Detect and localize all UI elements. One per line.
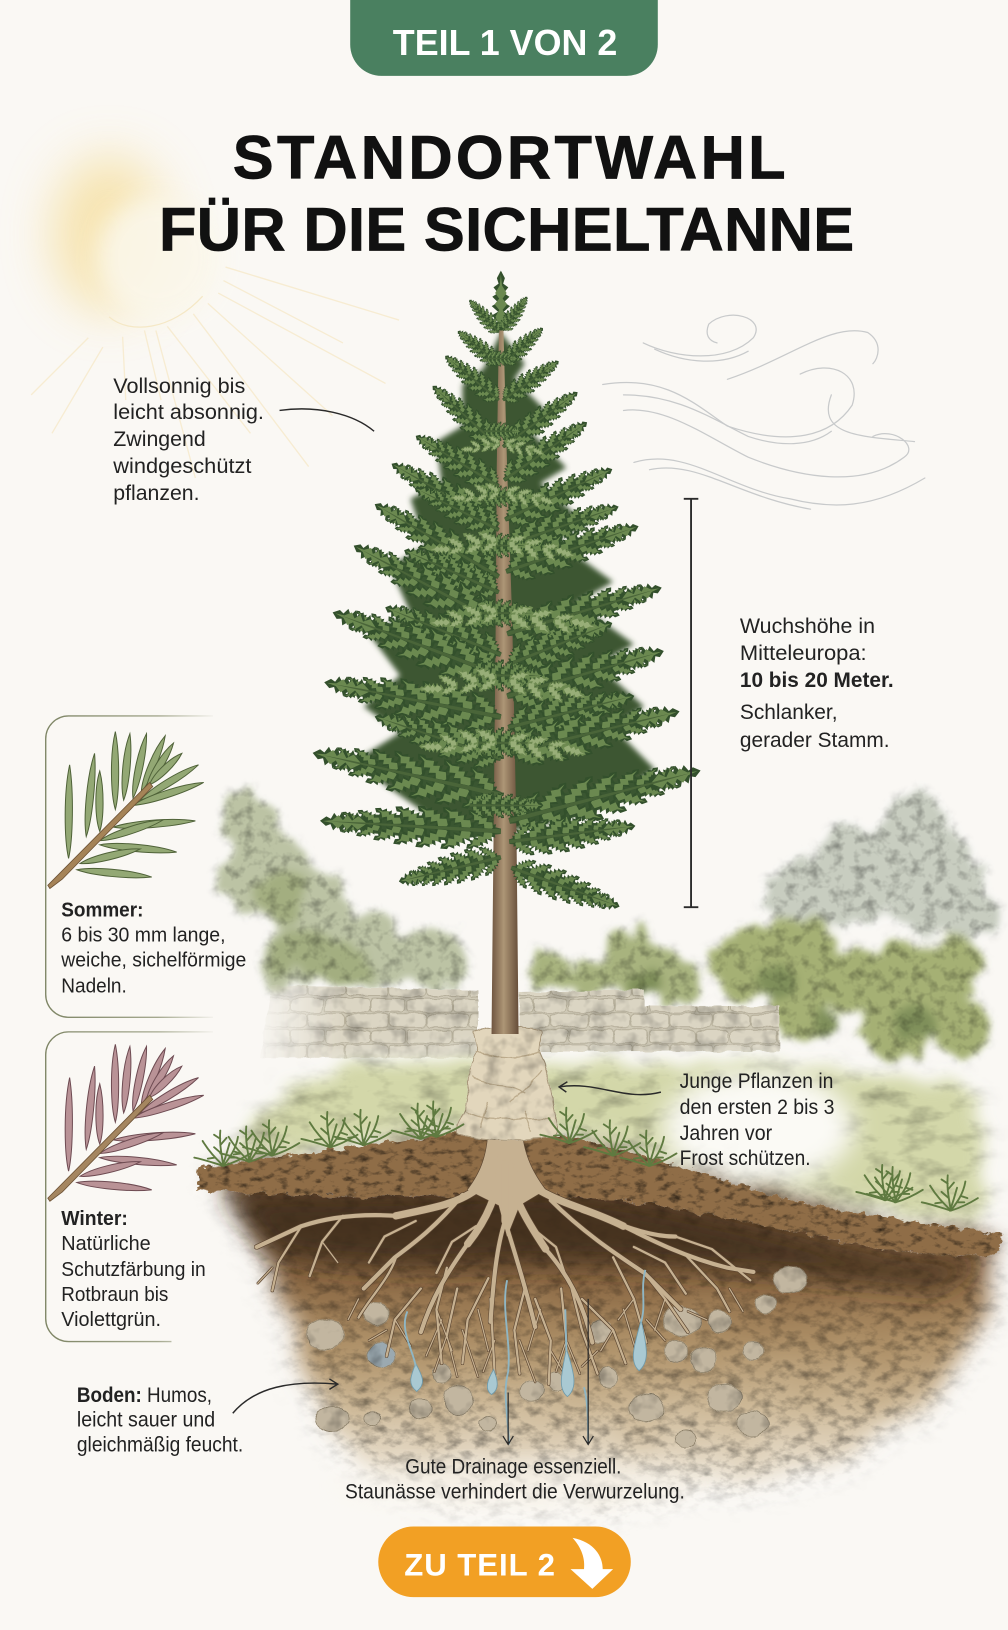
- text: frost protection note: Frost schützen.: [680, 1146, 811, 1170]
- icon: red-brown sprig: [48, 1044, 205, 1201]
- illustration: root system: [257, 1133, 753, 1384]
- text: frost protection note: Junge Pflanzen in: [680, 1069, 833, 1093]
- illustration: stone wall: [260, 985, 779, 1058]
- text: summer note: Nadeln.: [61, 975, 127, 997]
- text: soil note: leicht sauer und: [77, 1408, 215, 1432]
- text: drainage note: Gute Drainage essenziell.: [405, 1455, 621, 1479]
- text: drainage note: Staunässe verhindert die Verwurzelung.: [345, 1479, 685, 1503]
- text: growth height note: Wuchshöhe in: [740, 614, 875, 638]
- tree trunk: [492, 272, 519, 1034]
- illustration: grass field: [203, 1058, 992, 1231]
- text: winter note: Violettgrün.: [61, 1309, 161, 1331]
- text: drainage note: [333, 1455, 696, 1509]
- icon: green sprig: [48, 732, 205, 888]
- text: soil note: gleichmäßig feucht.: [77, 1433, 243, 1457]
- panel: winter needles: [46, 1032, 213, 1342]
- text: sun and wind note: Zwingend: [113, 427, 206, 451]
- button: to part 2: ZU TEIL 2: [404, 1547, 555, 1582]
- icon: curved arrow: [571, 1538, 613, 1589]
- text: soil note: [77, 1383, 243, 1457]
- text: winter note: Natürliche: [61, 1233, 151, 1255]
- text: summer note: 6 bis 30 mm lange,: [61, 924, 226, 946]
- arrow: soil note: [233, 1379, 338, 1413]
- button: to part 2: [378, 1527, 631, 1597]
- trunk-covering foliage: [470, 348, 543, 822]
- text: summer note: [60, 900, 246, 997]
- grass tufts: [194, 1101, 978, 1211]
- text: summer note: Sommer:: [61, 900, 143, 922]
- callout line: sun note: [280, 409, 374, 431]
- light foliage clusters: [415, 430, 600, 770]
- title: [159, 123, 854, 263]
- text: winter note: Schutzfärbung in: [61, 1259, 206, 1281]
- height scale bracket: [684, 499, 698, 907]
- text: winter note: Rotbraun bis: [61, 1284, 168, 1306]
- title: FÜR DIE SICHELTANNE: [159, 194, 854, 263]
- topsoil layer: [197, 1133, 1003, 1256]
- text: sun and wind note: leicht absonnig.: [113, 400, 264, 424]
- text: winter note: Winter:: [61, 1208, 128, 1230]
- text: growth height note: Schlanker,: [740, 700, 838, 724]
- illustration: sun: [31, 156, 399, 478]
- illustration: fir tree: [306, 271, 708, 1034]
- text: growth height note: Mitteleuropa:: [740, 641, 867, 665]
- text: frost protection note: den ersten 2 bis 3: [680, 1095, 834, 1119]
- panel: summer needles: [46, 716, 246, 1017]
- tree core foliage: [359, 333, 655, 831]
- text: winter note: [61, 1208, 206, 1331]
- illustration: background shrubs: [213, 790, 996, 1064]
- text: sun and wind note: pflanzen.: [113, 481, 200, 505]
- badge: part indicator: [350, 0, 658, 76]
- illustration: water drops and streams: [405, 1270, 646, 1444]
- drainage arrows: [503, 1299, 593, 1444]
- dark humus band: [223, 1190, 982, 1289]
- text: sun and wind note: Vollsonnig bis: [113, 374, 245, 398]
- tree branches: [306, 271, 708, 926]
- text: growth height note: [740, 614, 894, 752]
- badge: part indicator: TEIL 1 VON 2: [393, 22, 617, 63]
- title: STANDORTWAHL: [233, 123, 786, 192]
- text: sun and wind note: windgeschützt: [112, 454, 252, 478]
- illustration: wind swirls: [603, 315, 925, 509]
- arrow: frost note: [559, 1082, 661, 1095]
- text halo: frost note: [663, 1070, 854, 1185]
- illustration: stones in soil: [307, 1267, 806, 1448]
- illustration: soil cross-section: [197, 1133, 1003, 1509]
- text: sun and wind note: [112, 374, 264, 505]
- text: growth height note: gerader Stamm.: [740, 728, 890, 752]
- text: frost protection note: Jahren vor: [680, 1121, 772, 1145]
- text: soil note: Boden: Humos,: [77, 1383, 212, 1407]
- text: frost protection note: [680, 1069, 834, 1170]
- text: summer note: weiche, sichelförmige: [60, 949, 246, 971]
- text: growth height note: 10 bis 20 Meter.: [740, 668, 894, 692]
- illustration: burlap frost wrap: [456, 1026, 558, 1140]
